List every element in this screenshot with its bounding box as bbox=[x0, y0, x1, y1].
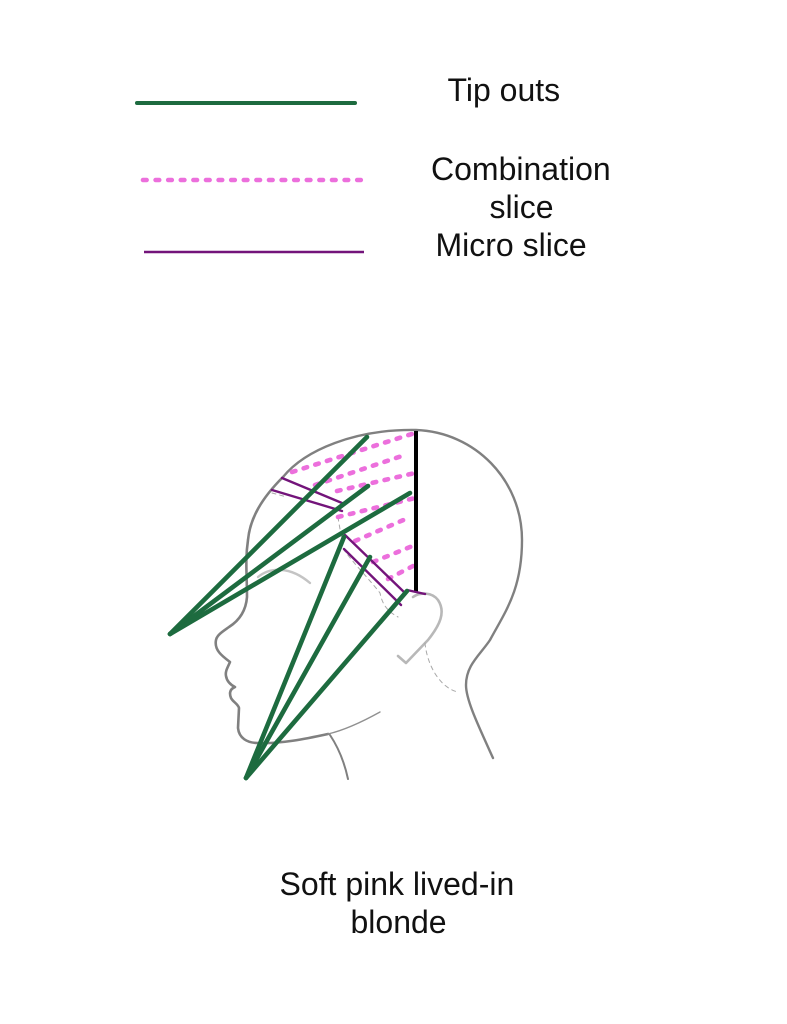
neck front bbox=[330, 735, 348, 779]
caption: blonde bbox=[350, 904, 447, 940]
caption bbox=[280, 866, 514, 940]
tip outs upper fan bbox=[170, 437, 410, 634]
crown and back of head outline bbox=[283, 430, 522, 758]
legend line: tip outs bbox=[137, 101, 355, 105]
ear bbox=[398, 594, 442, 663]
legend line: combination slice bbox=[143, 178, 362, 182]
head profile outline bbox=[216, 477, 328, 743]
micro slices bbox=[272, 478, 425, 605]
head diagram bbox=[170, 430, 522, 779]
dashed hairline bbox=[272, 493, 398, 617]
jaw line bbox=[328, 712, 380, 734]
dashed neck hairline bbox=[425, 643, 458, 692]
centre parting line bbox=[414, 431, 418, 592]
legend line: micro slice bbox=[144, 251, 364, 253]
legend label: combination slice: Combination bbox=[431, 151, 611, 187]
legend bbox=[137, 72, 611, 263]
legend label: tip outs: Tip outs bbox=[448, 72, 560, 108]
caption: Soft pink lived-in bbox=[280, 866, 514, 902]
combination slices bbox=[292, 433, 415, 579]
legend label: micro slice: Micro slice bbox=[436, 227, 587, 263]
eyebrow bbox=[258, 570, 310, 583]
tip outs lower fan bbox=[246, 537, 407, 778]
legend label: slice: slice bbox=[490, 189, 554, 225]
